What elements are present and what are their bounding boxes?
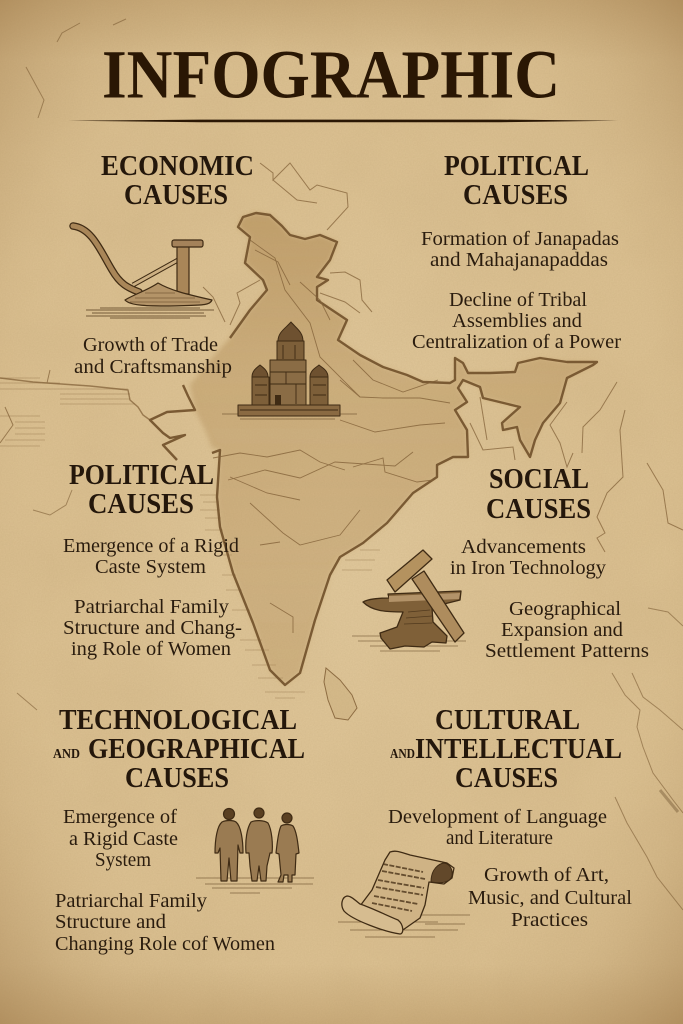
body text xyxy=(388,806,632,931)
body text: Patriarchal Family xyxy=(74,596,230,618)
heading xyxy=(101,151,254,211)
body text: Practices xyxy=(511,909,588,931)
icon: temple xyxy=(222,322,357,419)
heading xyxy=(53,705,305,794)
body text: Geographical xyxy=(509,598,621,620)
heading: AND xyxy=(53,747,80,762)
panel: cultural and intellectual causes xyxy=(338,705,632,937)
panel: economic causes xyxy=(73,151,254,378)
body text: Assemblies and xyxy=(452,310,582,332)
heading: CAUSES xyxy=(486,494,591,525)
heading xyxy=(486,464,591,525)
body text: Expansion and xyxy=(501,619,623,641)
body text: Emergence of a Rigid xyxy=(63,535,239,557)
body text xyxy=(74,334,232,378)
body text: Centralization of a Power xyxy=(412,331,621,353)
body text: Formation of Janapadas xyxy=(421,228,619,250)
heading: POLITICAL xyxy=(69,460,214,491)
body text: in Iron Technology xyxy=(450,557,607,579)
title: INFOGRAPHIC xyxy=(102,36,560,112)
icon: anvil and hammer xyxy=(352,550,466,651)
heading: CAUSES xyxy=(455,763,558,794)
heading: POLITICAL xyxy=(444,151,589,182)
map: neighbouring borders and rivers xyxy=(0,163,683,552)
heading: SOCIAL xyxy=(489,464,589,495)
body text: a Rigid Caste xyxy=(69,828,178,850)
panel: political causes (left) xyxy=(63,460,242,660)
body text: Music, and Cultural xyxy=(468,887,632,909)
heading xyxy=(390,705,622,794)
panel: technological and geographical causes xyxy=(53,705,314,955)
body text: Growth of Trade xyxy=(83,334,218,356)
body text: Patriarchal Family xyxy=(55,890,208,912)
heading: AND xyxy=(390,747,415,762)
icon: plough xyxy=(73,226,214,318)
heading: CULTURAL xyxy=(435,705,580,736)
heading: INTELLECTUAL xyxy=(415,734,622,765)
body text: Development of Language xyxy=(388,806,607,828)
heading: ECONOMIC xyxy=(101,151,254,182)
panel: political causes (top right) xyxy=(412,151,621,353)
heading: CAUSES xyxy=(125,763,229,794)
body text: System xyxy=(95,849,151,871)
heading: CAUSES xyxy=(124,180,228,211)
body text: Emergence of xyxy=(63,806,177,828)
body text: Structure and xyxy=(55,911,166,933)
body text: and Mahajanapaddas xyxy=(430,249,608,271)
map of India xyxy=(150,213,597,685)
heading: CAUSES xyxy=(88,489,194,520)
heading: GEOGRAPHICAL xyxy=(88,734,305,765)
body text: Growth of Art, xyxy=(484,864,609,886)
body text: and Literature xyxy=(446,827,553,849)
body text xyxy=(63,535,242,660)
heading xyxy=(69,460,214,520)
body text: Changing Role cof Women xyxy=(55,933,275,955)
body text xyxy=(412,228,621,353)
body text: Advancements xyxy=(461,536,586,558)
body text xyxy=(55,806,275,955)
heading xyxy=(444,151,589,211)
body text: Decline of Tribal xyxy=(449,289,587,311)
icon: scroll xyxy=(338,851,470,937)
sea hatching xyxy=(0,378,380,698)
panel: social causes xyxy=(352,464,649,662)
body text: ing Role of Women xyxy=(71,638,231,660)
heading: CAUSES xyxy=(463,180,568,211)
heading: TECHNOLOGICAL xyxy=(59,705,297,736)
body text: Settlement Patterns xyxy=(485,640,649,662)
rivers xyxy=(213,240,450,633)
body text xyxy=(450,536,649,662)
body text: Caste System xyxy=(95,556,206,578)
Sri Lanka xyxy=(324,668,357,720)
body text: and Craftsmanship xyxy=(74,356,232,378)
body text: Structure and Chang- xyxy=(63,617,242,639)
icon: three people xyxy=(196,808,314,893)
